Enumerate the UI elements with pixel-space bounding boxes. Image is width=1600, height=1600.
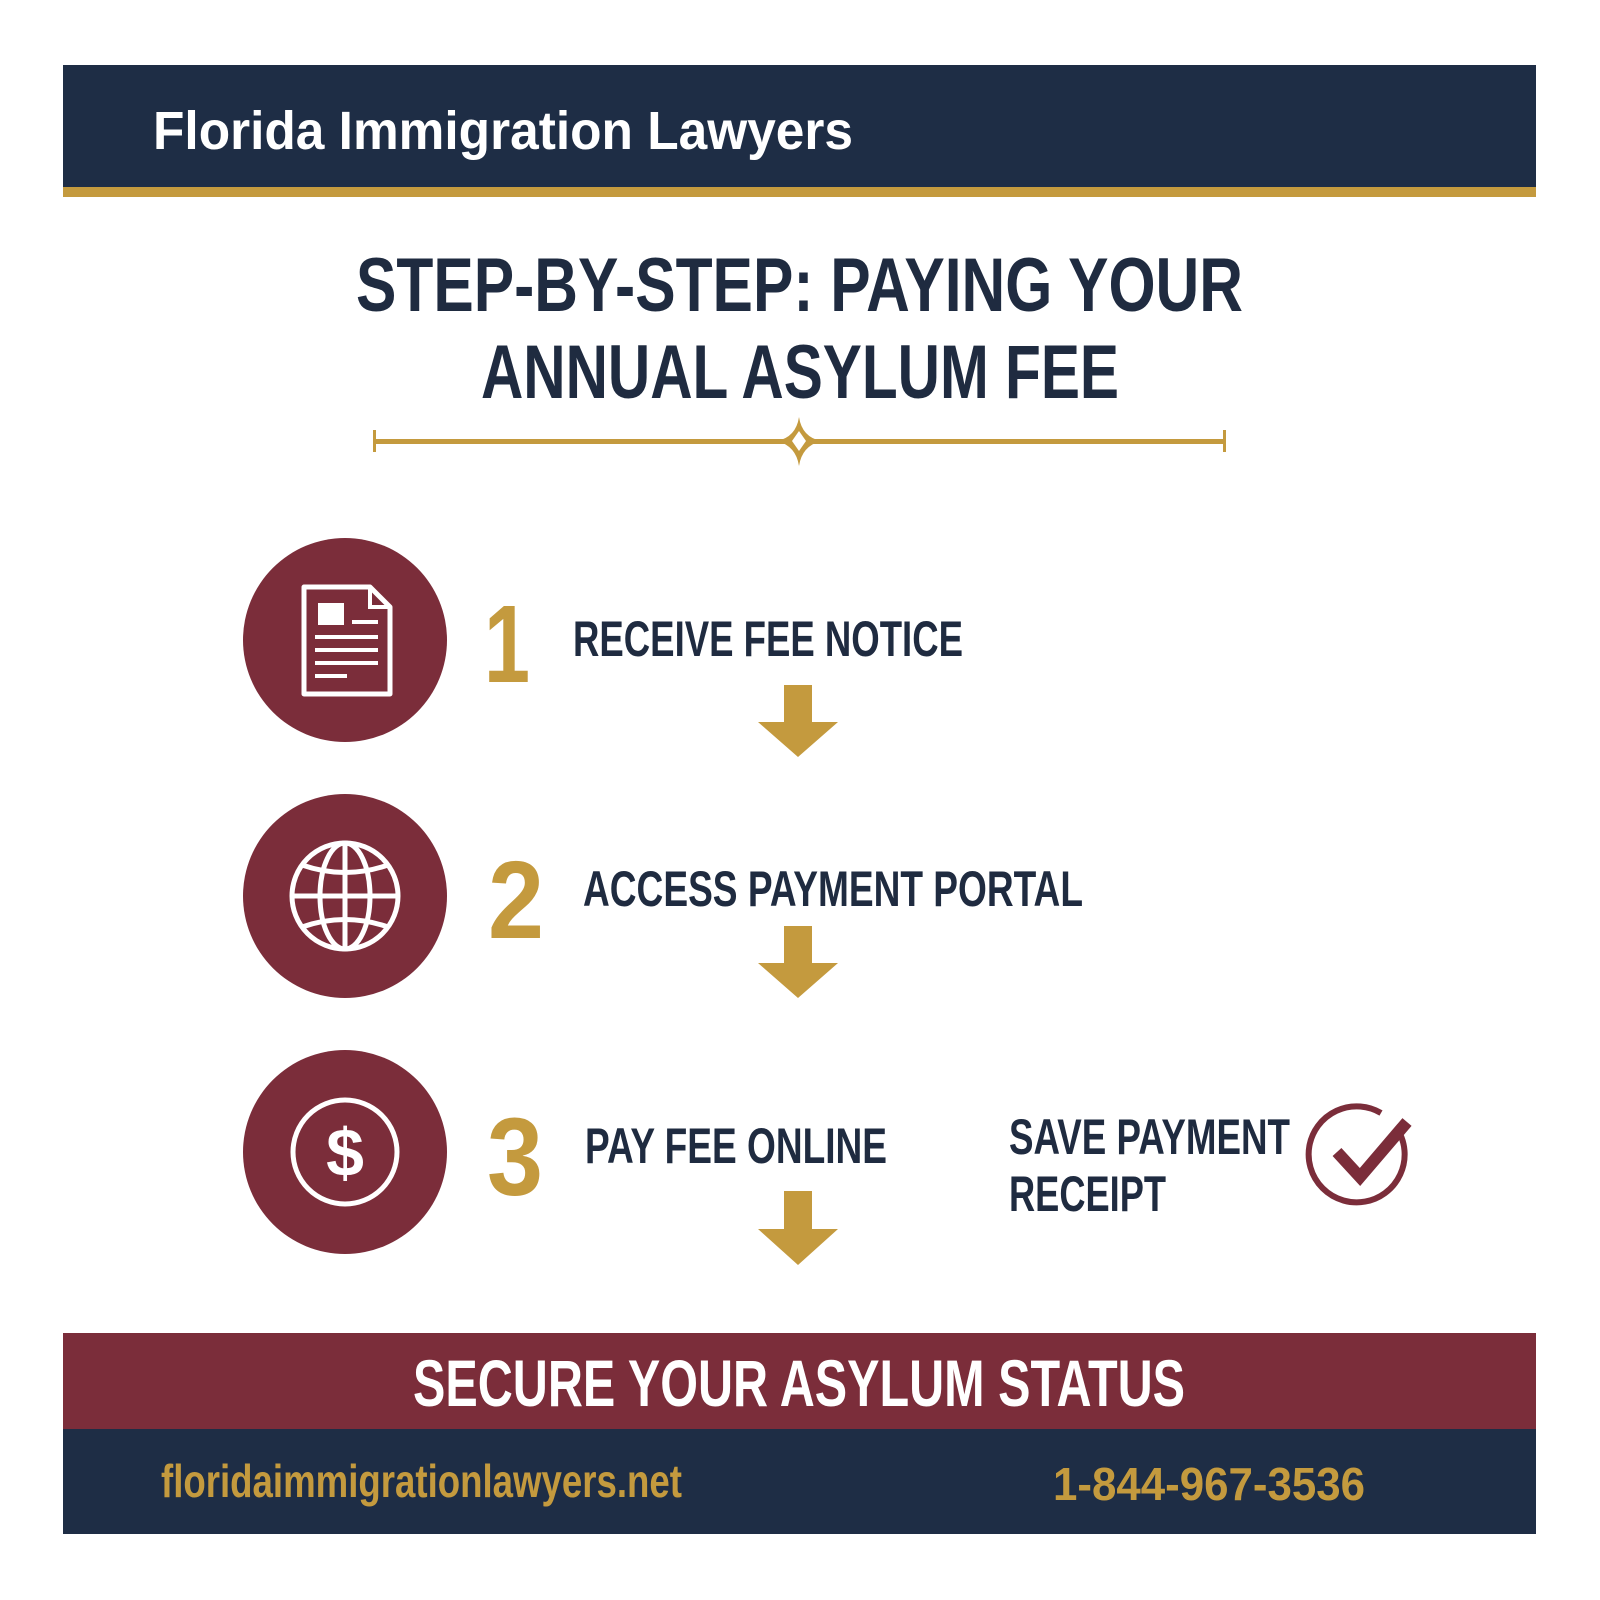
final step: save receipt: RECEIPT xyxy=(1009,1166,1166,1222)
step text: RECEIVE FEE NOTICE xyxy=(573,611,963,667)
phone: 1-844-967-3536 xyxy=(1053,1458,1365,1510)
arrow down xyxy=(758,926,838,998)
number 3: 3 xyxy=(487,1096,543,1219)
title: STEP-BY-STEP: PAYING YOUR xyxy=(356,243,1243,328)
banner: secure your asylum status xyxy=(63,1333,1536,1430)
step 1 xyxy=(243,538,963,757)
step text: ACCESS PAYMENT PORTAL xyxy=(583,861,1083,917)
title divider ornament xyxy=(373,417,1226,466)
step text: PAY FEE ONLINE xyxy=(585,1118,887,1174)
title: ANNUAL ASYLUM FEE xyxy=(481,330,1119,415)
arrow down xyxy=(758,685,838,757)
number 2: 2 xyxy=(488,839,544,962)
header brand text: Florida Immigration Lawyers xyxy=(153,101,853,161)
number 1: 1 xyxy=(484,583,530,706)
step 3 xyxy=(243,1050,887,1265)
website: floridaimmigrationlawyers.net xyxy=(161,1455,682,1507)
arrow down xyxy=(758,1191,838,1265)
step 2 xyxy=(243,794,1083,998)
footer xyxy=(63,1429,1536,1534)
title xyxy=(356,243,1243,415)
icon: globe xyxy=(243,794,447,998)
icon: check circle xyxy=(1309,1106,1407,1202)
header bar xyxy=(63,65,1536,197)
banner: secure your asylum status: SECURE YOUR ASYLUM STATUS xyxy=(413,1346,1185,1420)
icon: dollar coin: $ xyxy=(326,1115,364,1191)
icon: dollar coin xyxy=(243,1050,447,1254)
icon: document xyxy=(243,538,447,742)
final step: save receipt: SAVE PAYMENT xyxy=(1009,1109,1290,1165)
final step: save receipt xyxy=(1009,1106,1407,1222)
